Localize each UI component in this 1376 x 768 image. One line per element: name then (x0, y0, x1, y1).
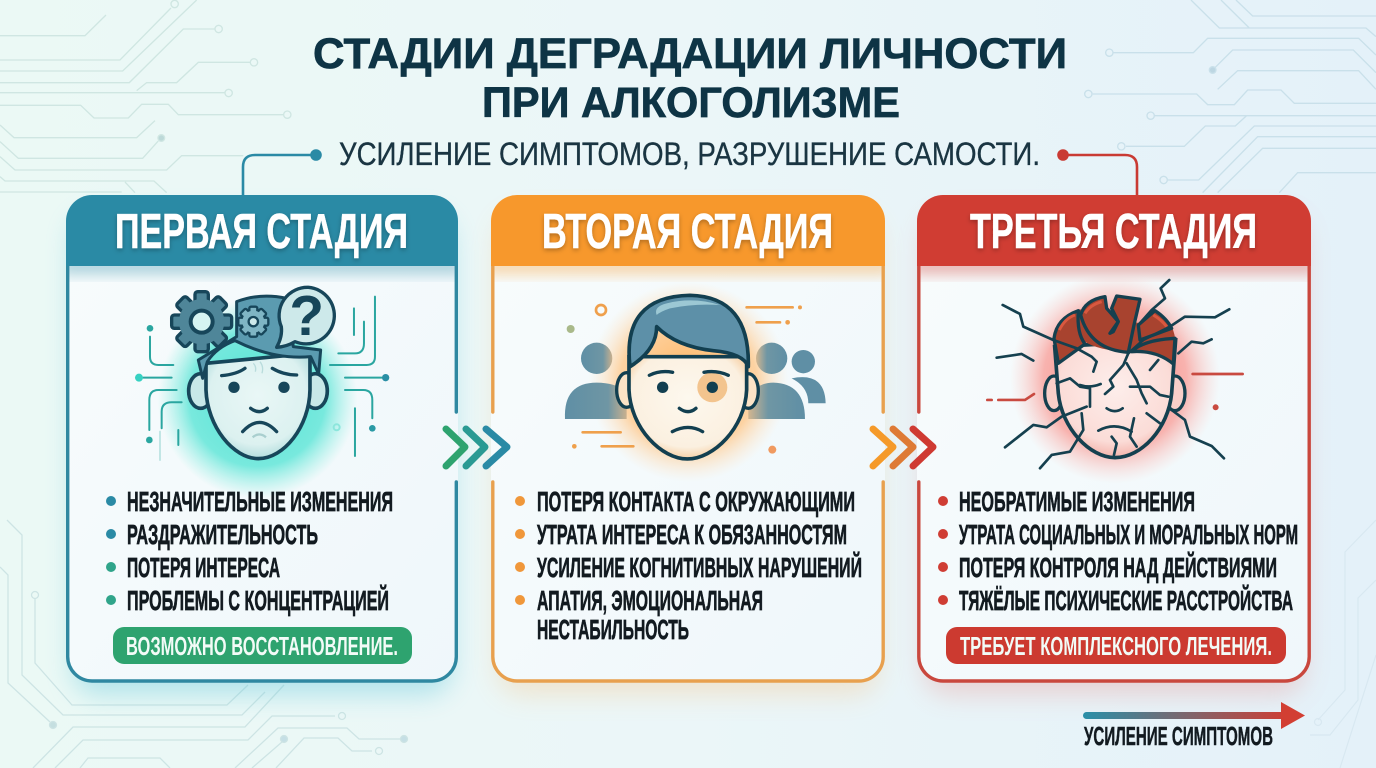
icon: cracked face (987, 273, 1243, 483)
background circuit pattern: top right (1085, 0, 1376, 193)
panel header (917, 195, 1311, 266)
panel header (491, 195, 885, 266)
symptom list: НЕЗНАЧИТЕЛЬНЫЕ ИЗМЕНЕНИЯ (127, 486, 393, 517)
heading: ТРЕТЬЯ СТАДИЯ (970, 205, 1257, 259)
heading: ВТОРАЯ СТАДИЯ (542, 205, 833, 259)
title (313, 30, 1067, 127)
icon: confused face with gears (135, 285, 389, 498)
symptom list: УСИЛЕНИЕ КОГНИТИВНЫХ НАРУШЕНИЙ (537, 552, 862, 583)
connector: left (243, 150, 320, 197)
symptom list: РАЗДРАЖИТЕЛЬНОСТЬ (127, 519, 318, 550)
symptom list: УТРАТА ИНТЕРЕСА К ОБЯЗАННОСТЯМ (537, 519, 847, 550)
panel: first stage (60, 195, 464, 695)
title: ПРИ АЛКОГОЛИЗМЕ (482, 79, 900, 127)
arrow: second to third stage (873, 429, 933, 466)
symptom list (515, 486, 862, 645)
subtitle: УСИЛЕНИЕ СИМПТОМОВ, РАЗРУШЕНИЕ САМОСТИ. (339, 136, 1040, 172)
symptom list: ПРОБЛЕМЫ С КОНЦЕНТРАЦИЕЙ (127, 585, 389, 616)
background circuit pattern: right side (1310, 520, 1376, 768)
symptom list (106, 486, 393, 616)
icon: confused face with gears: ? (289, 285, 324, 348)
panel: second stage (485, 195, 891, 695)
symptom list (938, 486, 1298, 616)
symptom list: ПОТЕРЯ КОНТАКТА С ОКРУЖАЮЩИМИ (537, 486, 855, 517)
panel: third stage (911, 195, 1317, 695)
symptom list: ПОТЕРЯ ИНТЕРЕСА (127, 552, 280, 583)
heading: ПЕРВАЯ СТАДИЯ (115, 205, 408, 259)
connector: right (1058, 150, 1137, 197)
arrow: symptom growth (1083, 702, 1305, 729)
symptom list: НЕСТАБИЛЬНОСТЬ (537, 614, 689, 645)
callout: recovery (113, 627, 412, 664)
callout: treatment (946, 627, 1286, 664)
icon: withdrawn face with people (565, 282, 826, 482)
arrow: first to second stage (446, 429, 507, 466)
background circuit pattern: top left (0, 0, 291, 193)
symptom list: АПАТИЯ, ЭМОЦИОНАЛЬНАЯ (537, 585, 763, 616)
callout: recovery: ВОЗМОЖНО ВОССТАНОВЛЕНИЕ. (126, 631, 398, 661)
symptom list: НЕОБРАТИМЫЕ ИЗМЕНЕНИЯ (959, 486, 1195, 517)
title: СТАДИИ ДЕГРАДАЦИИ ЛИЧНОСТИ (313, 30, 1067, 78)
panel header (66, 195, 458, 266)
background circuit pattern: bottom left (0, 520, 408, 768)
